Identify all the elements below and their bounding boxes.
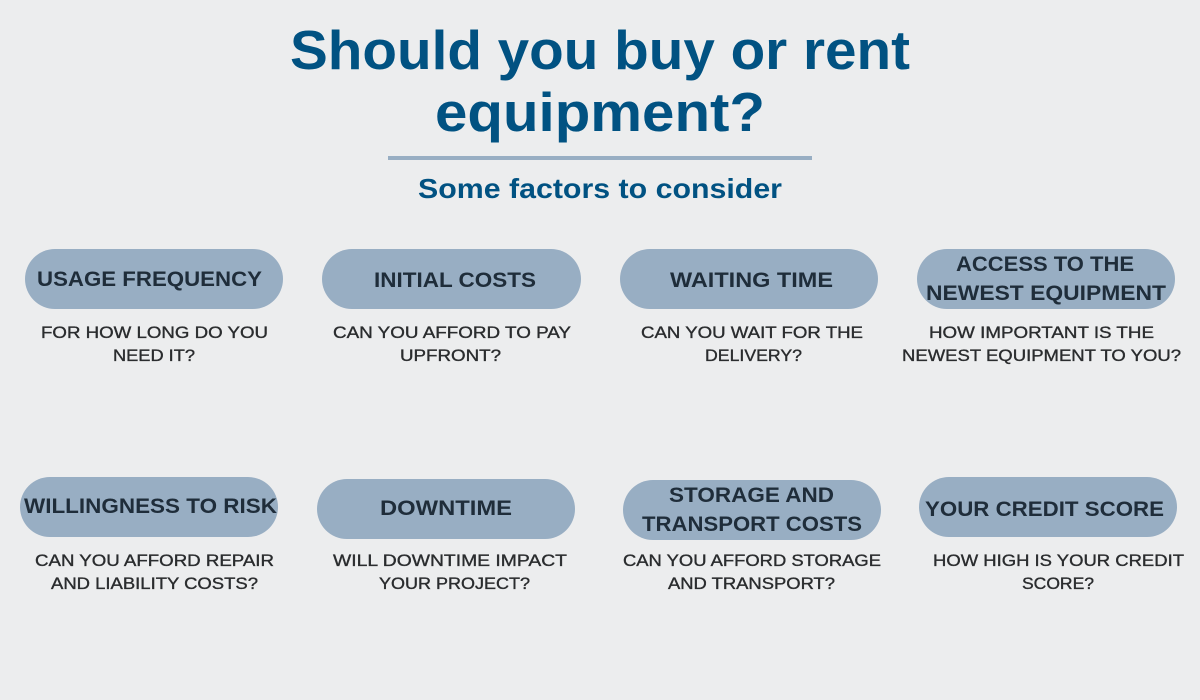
question: usage frequency: FOR HOW LONG DO YOU [41, 324, 268, 342]
subtitle: Some factors to consider [418, 173, 782, 204]
heading pill: your credit score [919, 477, 1177, 537]
panel: access to the newest equipment [902, 249, 1181, 365]
question: usage frequency [41, 324, 268, 365]
heading pill: access to the newest equipment: ACCESS TO THE [956, 253, 1134, 276]
question: initial costs: UPFRONT? [400, 347, 501, 365]
panel: waiting time [620, 249, 878, 365]
panel: willingness to risk [20, 477, 278, 593]
heading pill: storage and transport costs: TRANSPORT COSTS [642, 513, 862, 536]
question: storage and transport costs: AND TRANSPORT? [668, 575, 835, 593]
question: waiting time: CAN YOU WAIT FOR THE [641, 324, 863, 342]
question: access to the newest equipment: HOW IMPORTANT IS THE [929, 324, 1154, 342]
panel: downtime [317, 479, 575, 593]
question: downtime: WILL DOWNTIME IMPACT [333, 552, 567, 570]
heading pill: access to the newest equipment: NEWEST EQUIPMENT [926, 282, 1166, 305]
question: your credit score: HOW HIGH IS YOUR CREDIT [933, 552, 1184, 570]
question: waiting time [641, 324, 863, 365]
question: access to the newest equipment [902, 324, 1181, 365]
question: your credit score: SCORE? [1022, 575, 1094, 593]
question: your credit score [933, 552, 1184, 593]
heading pill: waiting time [620, 249, 878, 309]
question: willingness to risk: AND LIABILITY COSTS? [51, 575, 258, 593]
heading pill: storage and transport costs: STORAGE AND [669, 484, 834, 507]
title: Should you buy or rent [290, 19, 910, 81]
question: storage and transport costs [623, 552, 881, 593]
question: initial costs [333, 324, 571, 365]
question: willingness to risk [35, 552, 274, 593]
question: willingness to risk: CAN YOU AFFORD REPAIR [35, 552, 274, 570]
question: usage frequency: NEED IT? [113, 347, 195, 365]
panel: your credit score [919, 477, 1184, 593]
heading pill: usage frequency [25, 249, 283, 309]
heading pill: initial costs [322, 249, 581, 309]
question: initial costs: CAN YOU AFFORD TO PAY [333, 324, 571, 342]
question: access to the newest equipment: NEWEST EQUIPMENT TO YOU? [902, 347, 1181, 365]
heading pill: initial costs: INITIAL COSTS [374, 269, 536, 292]
panel: storage and transport costs [623, 480, 881, 593]
heading pill: waiting time: WAITING TIME [670, 269, 833, 292]
question: downtime: YOUR PROJECT? [379, 575, 530, 593]
heading pill: willingness to risk [20, 477, 278, 537]
title [290, 19, 910, 143]
question: waiting time: DELIVERY? [705, 347, 802, 365]
panel: initial costs [322, 249, 581, 365]
heading pill: willingness to risk: WILLINGNESS TO RISK [24, 495, 277, 518]
question: storage and transport costs: CAN YOU AFFORD STORAGE [623, 552, 881, 570]
heading pill: your credit score: YOUR CREDIT SCORE [925, 498, 1164, 521]
heading pill: usage frequency: USAGE FREQUENCY [37, 268, 262, 291]
panel: usage frequency [25, 249, 283, 365]
heading pill: access to the newest equipment [917, 249, 1175, 309]
heading pill: storage and transport costs [623, 480, 881, 540]
title: equipment? [435, 81, 765, 143]
heading pill: downtime [317, 479, 575, 539]
heading pill: downtime: DOWNTIME [380, 497, 512, 520]
question: downtime [333, 552, 567, 593]
